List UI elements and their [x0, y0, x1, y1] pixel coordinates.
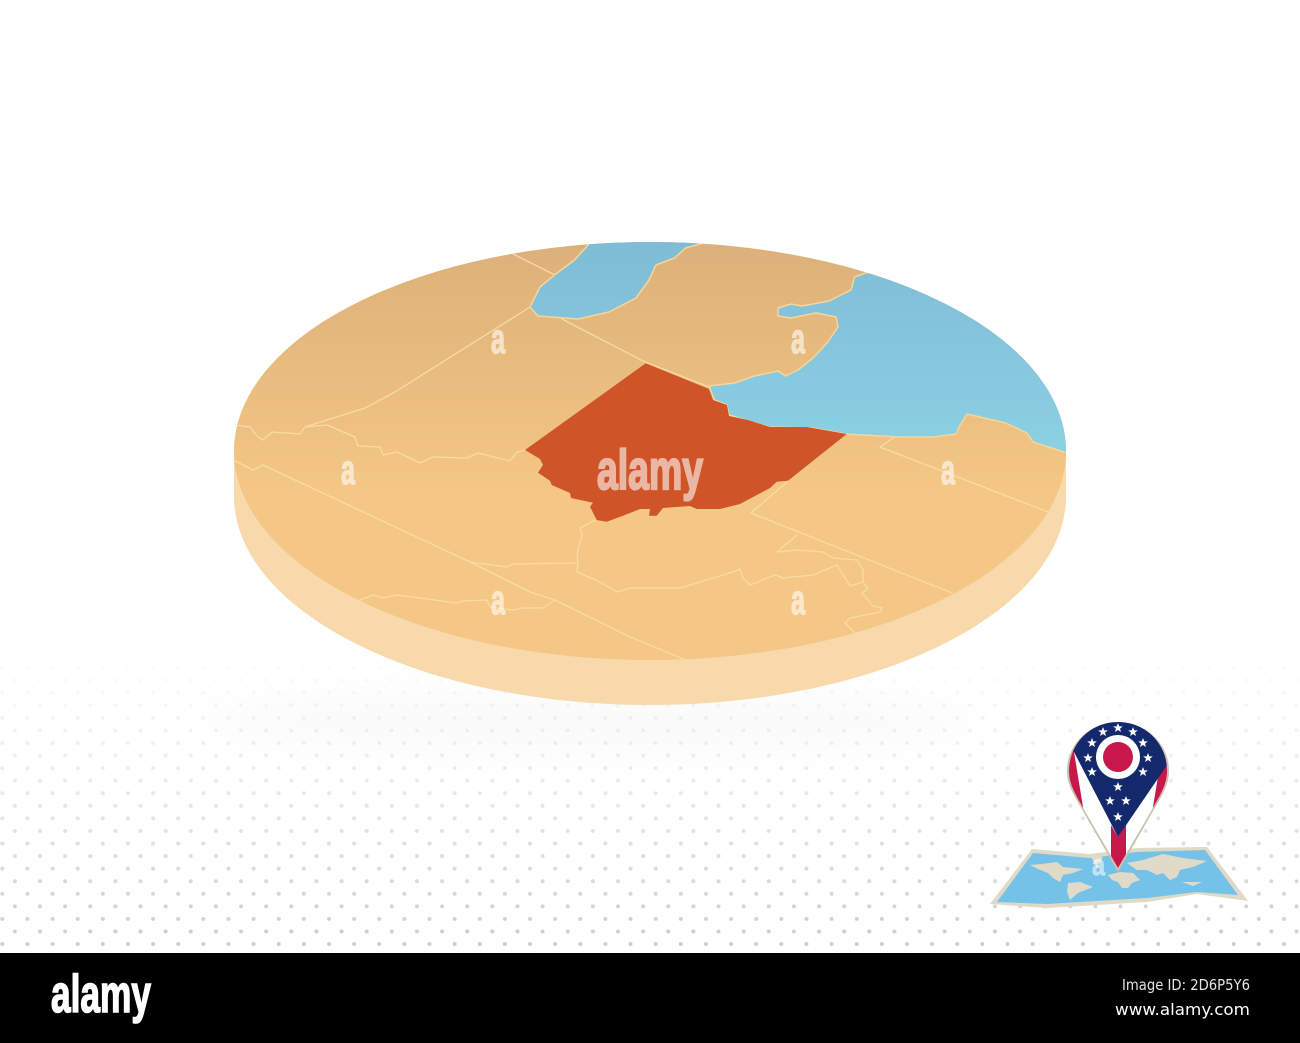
state borders	[235, 254, 1048, 660]
watermark letters on map: a	[341, 446, 355, 493]
isometric map disc	[234, 236, 1080, 705]
lake michigan	[530, 236, 704, 319]
map disc shadow	[190, 690, 990, 754]
lake erie	[709, 260, 1080, 454]
watermark letters on map: a	[491, 576, 505, 623]
watermark letters on map: a	[491, 315, 505, 362]
watermark letters on map: alamy	[597, 438, 703, 501]
footer bar	[0, 953, 1300, 1043]
watermark letters on map: a	[791, 315, 805, 362]
disc side edge	[234, 451, 1066, 705]
watermark letters on map: a	[791, 576, 805, 623]
footer logo: alamy	[51, 965, 151, 1024]
lakes	[530, 236, 1080, 454]
background dot pattern	[0, 704, 1299, 946]
pin rim	[1067, 722, 1169, 872]
image id: Image ID: 2D6P5Y6	[1122, 976, 1250, 994]
map continents	[1030, 854, 1207, 900]
map watermark letter: a	[1092, 849, 1105, 882]
watermark letters on map	[341, 315, 955, 623]
disc top land surface	[234, 242, 1066, 660]
highlighted state: Ohio	[525, 363, 847, 522]
pin flag	[1069, 722, 1167, 868]
icon: Ohio flag location pin	[1067, 722, 1169, 872]
website: www.alamy.com	[1115, 1000, 1250, 1019]
icon: folded world map	[990, 847, 1248, 908]
map paper border	[990, 847, 1248, 908]
watermark letters on map: a	[941, 446, 955, 493]
map ocean	[997, 850, 1238, 904]
